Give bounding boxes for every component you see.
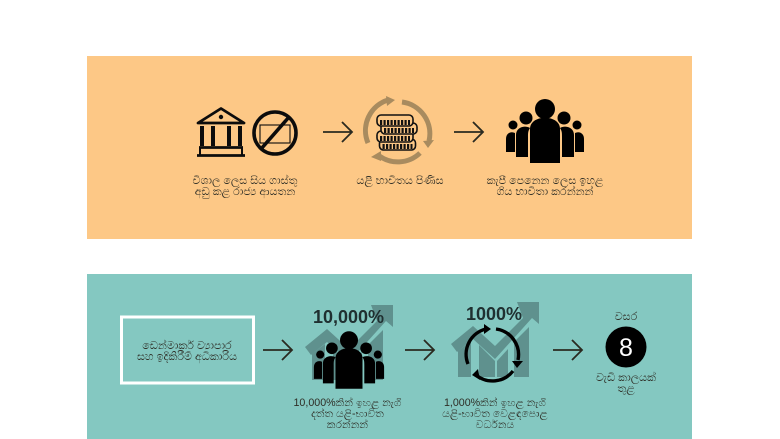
text: reduced fees caption: විශාල ලෙස සිය ගාස්තු [193, 173, 298, 188]
icon: bank building [197, 108, 245, 156]
arrow: market to years [553, 340, 582, 360]
text: market growth caption: යළි-භාවිත වෙළඳපොළ [442, 408, 549, 421]
icon: recycling coins [365, 96, 434, 162]
text: data users caption: කරන්නන් [327, 417, 368, 431]
icon: number 8 badge [606, 326, 646, 368]
arrow: authority to data users [263, 340, 292, 360]
icon: growth chart behind users [305, 305, 393, 380]
arrow: users to market [405, 340, 434, 360]
icon: growth chart behind market cycle [451, 302, 539, 377]
number: 10,000%: 10,000% [313, 307, 384, 327]
panel: orange top panel [87, 56, 692, 239]
icon: circular arrows [466, 324, 523, 381]
text: data users caption: 10,000%කින් ඉහළ නැගි [293, 395, 402, 410]
text: reduced fees caption: අඩු කළ රාජ්‍ය ආයතන [195, 186, 295, 199]
icon: users group [314, 331, 384, 389]
icon: number 8 badge: 8 [619, 334, 633, 362]
text: market growth caption: වර්ධනය [476, 418, 515, 431]
number: 1000%: 1000% [466, 304, 522, 324]
panel: teal bottom panel [87, 274, 692, 439]
text: over a period caption: වැඩි කාලයක් [596, 370, 656, 385]
text: users rose caption: කැපී පෙනෙන ලෙස ඉහළ [487, 175, 604, 188]
text: Danish authority name: ඩෙන්මාර්ක ව්‍යාපාර [142, 338, 232, 352]
arrow: coins to users [454, 122, 483, 142]
text: market growth caption: 1,000%කින් ඉහළ නැගි [444, 395, 546, 410]
text: years label: වසර [615, 311, 638, 323]
text: over a period caption: තුළ [617, 383, 635, 396]
text: data users caption: දත්ත යළි-භාවිත [311, 406, 384, 421]
arrow: bank to coins [323, 122, 352, 142]
text: reuse caption: යළි භාවිතය පිණිස [356, 175, 444, 188]
box: Danish authority [122, 317, 254, 383]
text: Danish authority name: සහ ඉදිකිරීම් අධිකාරිය [137, 350, 237, 364]
icon: crossed-out banknote [254, 112, 296, 154]
text: users rose caption: ගිය භාවිතා කරන්නන් [496, 184, 594, 198]
icon: group of users [506, 99, 584, 163]
